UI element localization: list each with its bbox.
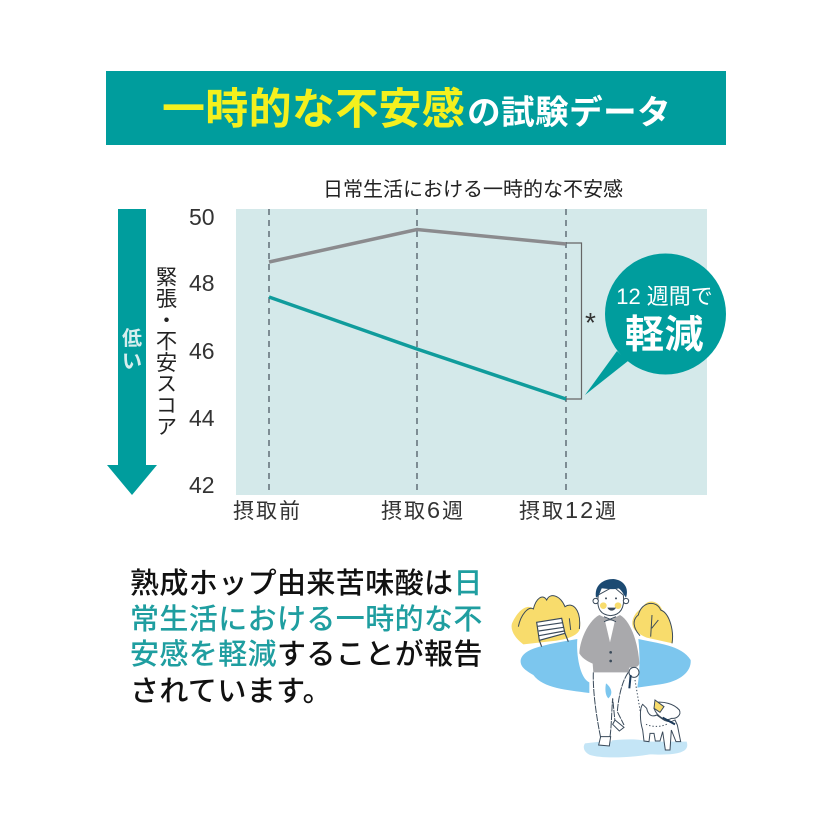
man [579,579,639,746]
x axis labels: 摂取12週 [519,497,618,523]
callout text: 12 週間で [616,284,713,309]
y axis numbers: 48 [189,270,215,296]
y axis title: 緊張・不安スコア [153,266,177,436]
dog [635,680,681,750]
significance bracket [566,243,582,399]
illustration: man walking a dog in a park [512,579,691,758]
y axis numbers: 46 [189,338,215,364]
body text [130,568,483,708]
body text: 安感を軽減することが報告 [130,639,483,671]
placebo line [269,230,566,262]
x axis labels: 摂取6週 [381,497,465,523]
bench [537,618,568,647]
y axis numbers [189,204,215,498]
body text: 熟成ホップ由来苦味酸は日 [130,568,483,600]
significance asterisk: * [585,307,596,338]
callout bubble [585,254,726,395]
title banner [106,71,726,145]
body text: されています。 [130,676,332,708]
chart title: 日常生活における一時的な不安感 [323,179,623,201]
title text: 一時的な不安感の試験データ [162,86,671,134]
x axis labels: 摂取前 [233,500,302,523]
y axis numbers: 44 [189,405,215,431]
callout text [616,284,713,357]
direction arrow: lower is better [107,209,157,495]
y axis numbers: 42 [189,472,215,498]
treatment line [269,297,566,399]
callout text: 軽減 [625,314,704,357]
body text: 常生活における一時的な不 [130,604,483,636]
pond [521,639,691,693]
x axis labels [233,497,618,523]
arrow label: 低い [122,328,142,373]
ground shadow [584,739,687,757]
y axis numbers: 50 [189,204,215,230]
bushes [512,596,673,644]
